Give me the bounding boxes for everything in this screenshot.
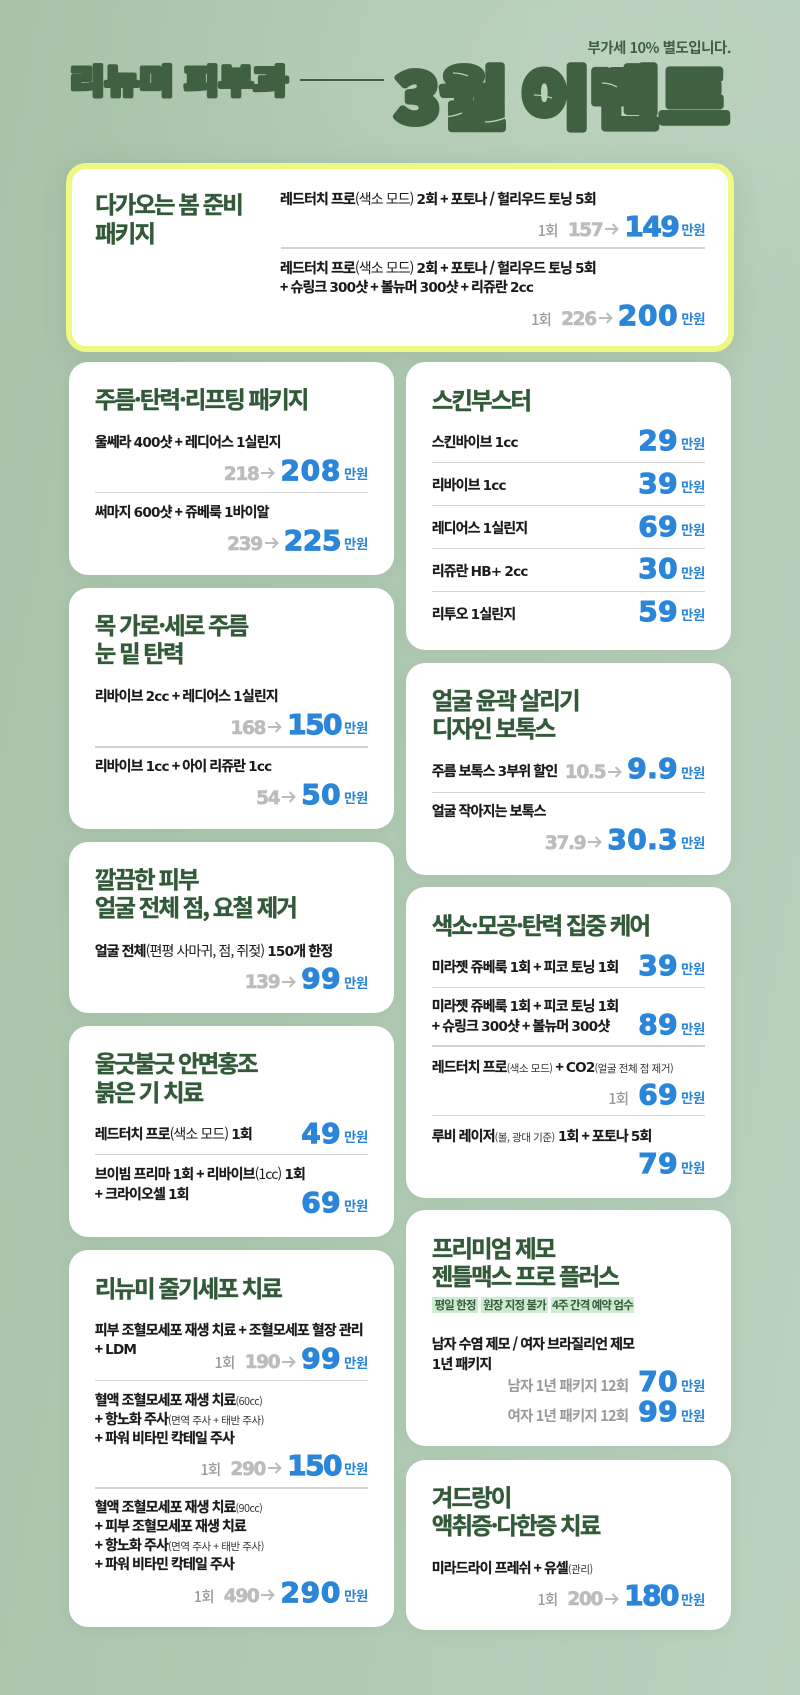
package description: 레드터치 프로(색소 모드) 2회 + 포토나 / 헐리우드 토닝 5회 (280, 258, 596, 278)
package description: 레드터치 프로(색소 모드) 1회 (95, 1124, 252, 1144)
panel: clean skin mole removal (69, 842, 394, 1013)
VAT note: 부가세 10% 별도입니다. (587, 37, 731, 58)
price row: 만원 (681, 1018, 705, 1038)
panel heading: 스킨부스터 (432, 382, 530, 416)
package description (95, 1390, 264, 1448)
item name: 남자 수염 제모 / 여자 브라질리언 제모 (432, 1334, 634, 1354)
panel heading: 액취증·다한증 치료 (432, 1507, 599, 1541)
package description: + 항노화 주사(면역 주사 + 태반 주사) (95, 1409, 264, 1429)
price row: 54 (256, 788, 279, 809)
price row (224, 454, 368, 487)
panel heading: 디자인 보톡스 (432, 710, 554, 744)
panel heading: 색소·모공·탄력 집중 케어 (432, 907, 649, 941)
panel heading: 목 가로·세로 주름 (95, 607, 247, 641)
price row: 1회 (531, 309, 551, 330)
price row: 69 (301, 1186, 341, 1219)
price row: 만원 (344, 1585, 368, 1605)
price row: 290 (230, 1459, 265, 1480)
item name (432, 997, 618, 1037)
price row: 79 (638, 1147, 678, 1180)
panel heading: 눈 밑 탄력 (95, 635, 183, 669)
price row (200, 1449, 368, 1482)
package description: + 항노화 주사(면역 주사 + 태반 주사) (95, 1535, 264, 1555)
price row (638, 597, 705, 630)
item name: 리투오 1실린지 (432, 604, 515, 624)
price row: 만원 (681, 562, 705, 582)
panel: stem cell treatment (69, 1250, 394, 1627)
arrow (605, 1593, 619, 1605)
package description: 혈액 조혈모세포 재생 치료(90cc) (95, 1497, 262, 1517)
panel heading (432, 1482, 599, 1539)
panel heading: 다가오는 봄 준비 (95, 186, 242, 220)
panel heading (95, 860, 296, 923)
item name: 레디어스 1실린지 (432, 518, 527, 538)
panel heading: 젠틀맥스 프로 플러스 (432, 1258, 618, 1292)
header connector line (300, 79, 384, 81)
price row: 만원 (681, 1589, 705, 1609)
item name: 주름 보톡스 3부위 할인 (432, 761, 557, 781)
price row (638, 1010, 705, 1043)
price row: 39 (638, 949, 678, 982)
panel heading (95, 1045, 258, 1108)
panel heading: 울긋불긋 안면홍조 (95, 1045, 257, 1079)
price row: 1회 (215, 1352, 235, 1373)
package description: + 슈링크 300샷 + 볼뉴머 300샷 + 리쥬란 2cc (280, 277, 533, 297)
price row (301, 1117, 368, 1150)
arrow (608, 766, 622, 778)
package description: + 피부 조혈모세포 재생 치료 (95, 1516, 246, 1536)
price row: 218 (224, 464, 258, 485)
price row: 30 (638, 552, 678, 585)
price row: 남자 1년 패키지 12회 (507, 1375, 628, 1396)
item name: + 슈링크 300샷 + 볼뉴머 300샷 (432, 1016, 609, 1036)
price row: 만원 (344, 1126, 368, 1146)
panel heading: 얼굴 윤곽 살리기 (432, 682, 579, 716)
price row: 여자 1년 패키지 12회 (507, 1405, 628, 1426)
panel heading: 프리미엄 제모 (432, 1230, 554, 1264)
panel heading (432, 684, 579, 742)
arrow (282, 976, 296, 988)
price row: 59 (638, 595, 678, 628)
tag: 평일 한정 (434, 1297, 476, 1313)
price row (507, 1367, 705, 1401)
price row: 만원 (344, 972, 368, 992)
price row (538, 210, 705, 243)
price row: 200 (567, 1589, 602, 1610)
heading: March event: 이벤트 (521, 46, 729, 142)
price row: 1회 (538, 220, 558, 241)
price row: 150 (287, 1449, 341, 1482)
arrow (261, 467, 275, 479)
heading: clinic name: 리뉴미 피부과 (70, 55, 288, 103)
price row: 239 (227, 534, 262, 555)
item name: 리쥬란 HB+ 2cc (432, 560, 528, 580)
package description (95, 1497, 264, 1574)
price row: 37.9 (545, 833, 585, 854)
panel heading: 겨드랑이 (432, 1479, 510, 1513)
item name: 리바이브 1cc (432, 475, 506, 495)
price row: 157 (568, 220, 602, 241)
price row (638, 951, 705, 984)
arrow (265, 537, 279, 549)
price row: 만원 (344, 1458, 368, 1478)
price row: 226 (561, 309, 596, 330)
package description (95, 1320, 363, 1359)
tag: 원장 지정 불가 (483, 1297, 546, 1313)
price row: 만원 (681, 1087, 705, 1107)
price row (194, 1576, 368, 1609)
price row (638, 1149, 705, 1182)
arrow (268, 721, 282, 733)
price row: 만원 (681, 433, 705, 453)
heading: March event: 3월 (395, 46, 507, 142)
price row: 1회 (537, 1589, 557, 1610)
price row: 290 (280, 1576, 341, 1609)
price row (245, 962, 368, 995)
price row: 만원 (681, 604, 705, 624)
price row (638, 554, 705, 587)
panel heading: 패키지 (95, 215, 154, 249)
package description: 써마지 600샷 + 쥬베룩 1바이알 (95, 502, 269, 522)
panel: facial redness treatment (69, 1026, 394, 1237)
price row (256, 778, 368, 811)
package description: + 파워 비타민 칵테일 주사 (95, 1554, 234, 1574)
price row: 99 (638, 1395, 678, 1428)
price row: 149 (624, 210, 678, 243)
arrow (605, 223, 619, 235)
price row: 190 (245, 1352, 279, 1373)
item name: 미라드라이 프레쉬 + 유셀(관리) (432, 1558, 593, 1578)
item name: 루비 레이저(볼, 광대 기준) 1회 + 포토나 5회 (432, 1126, 652, 1146)
panel heading (95, 607, 248, 669)
heading: March event (392, 46, 730, 142)
price row: 만원 (681, 1157, 705, 1177)
price row: 168 (230, 718, 265, 739)
item name: 스킨바이브 1cc (432, 432, 518, 452)
price row (537, 1581, 705, 1615)
price row: 99 (301, 1342, 341, 1375)
panel heading: 주름·탄력·리프팅 패키지 (95, 381, 307, 415)
price row (638, 512, 705, 545)
item name: 미라젯 쥬베룩 1회 + 피코 토닝 1회 (432, 996, 618, 1016)
package description: + LDM (95, 1339, 136, 1359)
price row: 1회 (200, 1459, 220, 1480)
price row: 49 (301, 1117, 341, 1150)
item name: 얼굴 작아지는 보톡스 (432, 801, 546, 821)
price row: 만원 (344, 533, 368, 553)
item name: 미라젯 쥬베룩 1회 + 피코 토닝 1회 (432, 957, 618, 977)
price row (227, 524, 368, 557)
price row: 30.3 (607, 823, 678, 856)
package description: 브이빔 프리마 1회 + 리바이브(1cc) 1회 (95, 1164, 305, 1184)
price row: 만원 (681, 832, 705, 852)
price row: 만원 (681, 1405, 705, 1425)
price row: 139 (245, 972, 279, 993)
price row: 만원 (681, 1375, 705, 1395)
package description: 얼굴 전체(편평 사마귀, 점, 쥐젖) 150개 한정 (95, 940, 332, 960)
price row: 1회 (608, 1088, 628, 1109)
panel: underarm hyperhidrosis treatment (406, 1460, 731, 1630)
panel: skin booster (406, 362, 731, 650)
package description: 혈액 조혈모세포 재생 치료(60cc) (95, 1390, 262, 1410)
price row: 9.9 (627, 752, 678, 785)
price row (230, 708, 368, 741)
price row: 만원 (344, 463, 368, 483)
price row (565, 754, 705, 788)
price row: 180 (624, 1579, 678, 1612)
price row (301, 1186, 368, 1219)
package description: 레드터치 프로(색소 모드) 2회 + 포토나 / 헐리우드 토닝 5회 (280, 189, 596, 209)
price row: 150 (287, 708, 341, 741)
price row: 만원 (681, 762, 705, 782)
price row (638, 426, 705, 459)
price row: 50 (301, 778, 341, 811)
panel heading: 리뉴미 줄기세포 치료 (95, 1270, 281, 1304)
package description: 울쎄라 400샷 + 레디어스 1실린지 (95, 432, 281, 452)
arrow (268, 1462, 282, 1474)
price row: 99 (301, 962, 341, 995)
price row (638, 469, 705, 502)
price row: 29 (638, 424, 678, 457)
price row: 만원 (681, 958, 705, 978)
price row: 만원 (344, 1195, 368, 1215)
panel heading: 얼굴 전체 점, 요철 제거 (95, 889, 296, 923)
price row (545, 825, 705, 859)
panel heading (95, 186, 242, 249)
price row (215, 1342, 368, 1375)
panel heading: 깔끔한 피부 (95, 860, 198, 894)
panel: wrinkle elasticity lifting package (69, 362, 394, 575)
panel heading: 붉은 기 치료 (95, 1074, 202, 1108)
package description: + 파워 비타민 칵테일 주사 (95, 1428, 234, 1448)
panel heading (432, 1232, 618, 1290)
price row: 225 (284, 524, 341, 557)
price row: 69 (638, 1078, 678, 1111)
price row: 만원 (681, 219, 705, 239)
panel: spring preparation package (66, 163, 734, 352)
panel: facial contour botox (406, 663, 731, 874)
price row (531, 299, 705, 332)
price row (507, 1397, 705, 1431)
price row: 만원 (681, 308, 705, 328)
item name: 1년 패키지 (432, 1354, 491, 1374)
price row: 만원 (681, 519, 705, 539)
arrow (282, 791, 296, 803)
price row: 69 (638, 510, 678, 543)
price row: 1회 (194, 1586, 214, 1607)
arrow (588, 836, 602, 848)
price row: 만원 (344, 1352, 368, 1372)
arrow (282, 1356, 296, 1368)
arrow (599, 312, 613, 324)
item name: 레드터치 프로(색소 모드) + CO2(얼굴 전체 점 제거) (432, 1057, 673, 1077)
package description (280, 258, 596, 297)
price row (608, 1080, 705, 1114)
price row: 490 (224, 1586, 258, 1607)
package description: + 크라이오셀 1회 (95, 1184, 189, 1204)
price row: 200 (618, 299, 678, 332)
price row: 39 (638, 467, 678, 500)
price row: 70 (638, 1365, 678, 1398)
panel: premium hair removal (406, 1210, 731, 1446)
package description: 리바이브 2cc + 레디어스 1실린지 (95, 686, 278, 706)
package description: 리바이브 1cc + 아이 리쥬란 1cc (95, 756, 271, 776)
item name (432, 1335, 634, 1374)
price row: 만원 (681, 476, 705, 496)
panel: neck wrinkles and under-eye (69, 588, 394, 829)
package description: 피부 조혈모세포 재생 치료 + 조혈모세포 혈장 관리 (95, 1320, 363, 1340)
price row: 89 (638, 1008, 678, 1041)
price row: 10.5 (565, 762, 605, 783)
package description (95, 1164, 305, 1204)
price row: 만원 (344, 717, 368, 737)
arrow (261, 1589, 275, 1601)
panel: pigment pore elasticity care (406, 887, 731, 1198)
price row: 208 (280, 454, 341, 487)
tag: 4주 간격 예약 엄수 (552, 1297, 633, 1313)
price row: 만원 (344, 787, 368, 807)
